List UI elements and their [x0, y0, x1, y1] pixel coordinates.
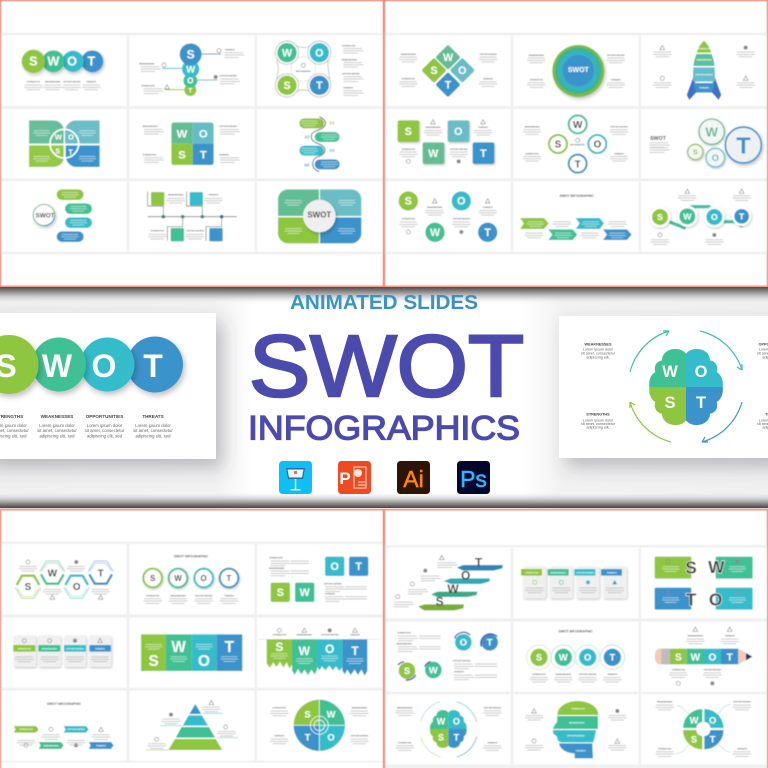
slide: dripping banners: T — [351, 644, 359, 658]
slide: right brain diagram: WEAKNESSES — [584, 342, 612, 346]
slide: timeline — [148, 192, 237, 241]
slide: diamonds: W — [443, 52, 454, 64]
slide: swirl circles — [527, 630, 625, 682]
slide: colour columns — [141, 634, 242, 671]
slide: circles with arcs: W — [429, 665, 438, 675]
slide: circles with arcs: THREATS — [454, 671, 465, 674]
slide: overlapping circles — [22, 50, 103, 90]
slide: four panels with ring: O — [68, 132, 74, 141]
slide: diamonds: S — [430, 65, 438, 77]
slide: left SWOT circles: sit amet, consectetur — [37, 428, 77, 433]
slide: ring row: OPPORTUNITIES — [195, 595, 213, 597]
slide: rocket: OPPORTUNITIES — [695, 74, 713, 76]
title: SWOT: SWOT — [249, 318, 524, 415]
slide: head silhouette: WEAKNESSES — [569, 721, 585, 724]
slide: four linked circles: INFOGRAPHIC — [296, 70, 311, 73]
slide: solid circles staggered: WEAKNESSES — [427, 206, 443, 209]
slide: left SWOT circles: O — [92, 348, 116, 384]
slide: diamonds: WEAKNESSES — [401, 53, 417, 56]
slide: puzzle square: O — [199, 128, 208, 140]
slide: 3D steps: T — [475, 555, 483, 569]
slide: swirl circles: THREATS — [607, 673, 618, 676]
slide: swirl circles: OPPORTUNITIES — [579, 674, 597, 676]
slide: dripping banners — [258, 628, 380, 676]
slide: ring cross: THREATS — [614, 152, 625, 155]
slide: donut: W — [690, 716, 699, 726]
slide: rocket: STRENGTHS — [697, 49, 711, 51]
slide: hexagons: O — [73, 582, 81, 593]
slide: solid circles staggered: W — [430, 227, 441, 239]
slide: rounded four panels with center badge — [278, 189, 361, 243]
slide: ring cross: W — [573, 120, 583, 131]
panel: centre hero band — [0, 287, 768, 509]
slide: dripping banners: STRENGTHS — [273, 635, 287, 637]
slide: ribbon with circles: T — [739, 211, 745, 221]
slide: donut: WEAKNESSES — [657, 701, 673, 704]
slide: left SWOT circles: sit amet, consectetur — [133, 428, 173, 433]
slide: serpentine pills: 04 — [304, 162, 310, 167]
slide: solid circles staggered — [399, 191, 497, 242]
slide: left SWOT circles: Lorem ipsum dolor — [87, 423, 123, 428]
band background — [0, 287, 768, 509]
slide: stacked column circles: T — [188, 87, 192, 94]
slide: serpentine pills — [299, 117, 340, 172]
panel frame — [384, 0, 768, 286]
slide: 3D steps — [394, 555, 503, 610]
slide: letter-notched rectangles: O — [709, 590, 722, 610]
slide: offset squares: T — [480, 148, 487, 160]
slide: right brain diagram: sit amet, consectetur — [581, 422, 616, 426]
slide: puzzle square: S — [178, 150, 186, 162]
slide: pencil: STRENGTHS — [672, 669, 686, 671]
slide: left SWOT circles: Lorem ipsum dolor — [39, 423, 75, 428]
slide: arrow tags: OPPORTUNITIES — [67, 729, 85, 731]
slide: puzzle square: W — [177, 128, 188, 140]
icon: Photoshop: Ps — [460, 466, 487, 492]
slide: dripping banners: W — [299, 644, 311, 658]
panel frame — [0, 510, 384, 768]
slide: quartered pie — [270, 700, 369, 751]
slide: puzzle square: WEAKNESSES — [142, 125, 158, 128]
slide: ring cross: OPPORTUNITIES — [610, 126, 628, 128]
slide: four linked circles: STRENGTHS — [342, 45, 356, 47]
slide: bubbles: SWOT — [650, 136, 667, 142]
slide: colour columns: S — [149, 653, 159, 670]
slide: letter-notched rectangles: W — [708, 557, 725, 577]
slide: offset squares: WEAKNESSES — [425, 126, 441, 129]
slide: right brain diagram: adipiscing elit, — [586, 426, 610, 430]
slide: serpentine pills: 01 — [330, 121, 335, 126]
slide: diamonds: O — [458, 65, 466, 77]
slide: bubbles: S — [693, 148, 698, 157]
slide: solid circles staggered: S — [405, 196, 412, 208]
cycle arrows — [630, 331, 742, 442]
slide: donut: O — [709, 716, 716, 726]
slide: offset squares: W — [428, 148, 439, 160]
slide: timeline: THREATS — [208, 194, 219, 197]
slide: ring cross: STRENGTHS — [525, 153, 539, 155]
icon: PowerPoint — [338, 461, 371, 494]
slide: pencil: O — [708, 652, 716, 663]
slide: left SWOT circles: adipiscing elit, sed — [87, 434, 123, 438]
slide: serpentine pills: 03 — [330, 148, 335, 153]
slide: left SWOT circles: THREATS — [142, 414, 164, 419]
slide: four panels with ring — [29, 120, 100, 167]
slide: overlapping circles: W — [47, 55, 59, 69]
slide: circles with arcs: T — [487, 638, 493, 648]
slide: offset squares: STRENGTHS — [402, 149, 416, 151]
slide: pencil: T — [727, 652, 733, 663]
slide: concentric circle: THREATS — [611, 79, 621, 82]
panel: top-right slide collection — [384, 0, 768, 286]
slide: four linked circles: T — [316, 80, 323, 92]
slide: puzzle square: T — [200, 150, 207, 162]
slide: concentric circle: OPPORTUNITIES — [607, 55, 625, 57]
slide: ring row: STRENGTHS — [146, 595, 160, 597]
slide: ring cross: INFOGRAPHIC — [570, 144, 586, 147]
slide: arrow tags — [14, 702, 114, 749]
slide: stacked column circles — [139, 43, 244, 96]
slide: four linked circles: THREATS — [343, 87, 354, 90]
slide: swirl circles: SWOT INFOGRAPHIC — [559, 630, 593, 634]
slide: circles with arcs — [396, 632, 498, 680]
slide: solid circles staggered: OPPORTUNITIES — [453, 219, 471, 221]
slide: dripping banners: O — [325, 642, 334, 656]
slide: offset squares: S — [405, 126, 412, 138]
slide: ring row: WEAKNESSES — [170, 594, 186, 597]
slide: arrow tags: SWOT INFOGRAPHIC — [47, 702, 82, 706]
slide: 3D steps: O — [461, 569, 470, 583]
slide: solid circles staggered: O — [457, 196, 465, 208]
panel: bottom-left slide collection — [0, 510, 384, 768]
slide: icon cards: OPPORTUNITIES — [66, 648, 84, 650]
slide: right brain diagram: S — [664, 394, 676, 412]
slide: diamonds: T — [445, 80, 452, 92]
slide: overlapping circles: OPPORTUNITIES — [63, 81, 81, 83]
slide: offset squares: OPPORTUNITIES — [450, 149, 468, 151]
slide: bubbles: T — [736, 133, 750, 159]
slide: squares and text: WEAKNESSES — [269, 567, 285, 570]
slide: ring cross: O — [593, 140, 601, 151]
slide: squares and text — [269, 557, 368, 602]
slide: dripping banners: S — [275, 640, 283, 654]
brain — [649, 349, 723, 425]
slide: pencil: OPPORTUNITIES — [704, 669, 722, 671]
slide: four linked circles: O — [315, 47, 323, 59]
slide: head silhouette — [525, 701, 627, 758]
slide: 3D steps: W — [447, 582, 459, 596]
slide: four panels with ring: T — [68, 147, 73, 156]
slide: hexagons: T — [98, 568, 104, 579]
slide: brain cycle — [395, 702, 502, 757]
slide: stacked column circles: W — [186, 64, 195, 74]
slide: dripping banners: WEAKNESSES — [297, 634, 313, 637]
slide: swirl circles: W — [559, 653, 568, 663]
slide: pyramid — [146, 700, 238, 750]
slide: icon cards: STRENGTHS — [18, 648, 32, 650]
heading: animated slides: ANIMATED SLIDES — [290, 291, 478, 314]
slide: swirl circles: S — [536, 653, 542, 663]
slide: left SWOT circles — [0, 313, 216, 459]
slide: right brain diagram — [559, 316, 768, 458]
slide: arrow tags: THREATS — [96, 744, 107, 747]
slide: ring row — [143, 554, 238, 604]
slide: ribbon with circles: S — [657, 212, 663, 222]
slide: ring row: W — [174, 574, 182, 583]
slide: head silhouette: THREATS — [576, 750, 586, 753]
slide: swirl circles: O — [584, 653, 591, 663]
slide: brain cycle: O — [453, 717, 460, 727]
slide: dripping banners: OPPORTUNITIES — [321, 635, 339, 637]
slide: swirl circles: T — [609, 653, 615, 663]
slide: circles with arcs: WEAKNESSES — [396, 642, 412, 645]
slide: tagged cards: THREATS — [607, 571, 617, 574]
slide: squares and text: OPPORTUNITIES — [324, 583, 342, 585]
slide: overlapping circles: WEAKNESSES — [45, 80, 61, 83]
icon: Photoshop — [457, 461, 490, 494]
slide: four linked circles: W — [282, 47, 293, 59]
panel frame — [384, 510, 768, 768]
slide: concentric circle: STRENGTHS — [530, 80, 544, 82]
slide: letter-notched rectangles: T — [686, 590, 697, 610]
slide: left SWOT circles: WEAKNESSES — [41, 414, 73, 419]
slide: brain cycle: W — [437, 717, 446, 727]
slide: overlapping circles: S — [29, 55, 38, 69]
slide: colour columns: O — [198, 653, 210, 670]
slide: overlapping circles: O — [67, 55, 77, 69]
slide: quartered pie: THREATS — [274, 735, 285, 738]
slide: left SWOT circles: Lorem ipsum dolor — [135, 423, 171, 428]
slide: left SWOT circles: W — [42, 348, 73, 384]
slide: right brain diagram: O — [695, 363, 708, 381]
slide: timeline: WEAKNESSES — [168, 194, 184, 197]
panel frame — [0, 0, 384, 286]
slide: hexagons: S — [25, 582, 32, 593]
slide: left SWOT circles: T — [143, 348, 163, 384]
slide: pencil: W — [691, 652, 701, 663]
slide: four linked circles — [275, 41, 363, 97]
slide: puzzle square: STRENGTHS — [143, 154, 157, 156]
slide: right brain diagram: T — [696, 394, 706, 412]
slide: right brain diagram: W — [662, 363, 678, 381]
slide: circles with arcs: OPPORTUNITIES — [453, 661, 471, 663]
slide: left SWOT circles: sit amet, consectetur — [85, 428, 125, 433]
slide: right brain diagram: STRENGTHS — [586, 412, 610, 416]
slide: donut: S — [691, 734, 697, 744]
slide: swirl circles: WEAKNESSES — [556, 673, 572, 676]
slide: right brain diagram: adipiscing elit, — [586, 356, 610, 360]
slide: quartered pie: OPPORTUNITIES — [351, 736, 369, 738]
slide: hexagons: W — [48, 568, 58, 579]
slide: puzzle square: OPPORTUNITIES — [219, 126, 237, 128]
title: infographics: INFOGRAPHICS — [248, 410, 520, 448]
slide: offset squares — [398, 120, 494, 164]
slide: brain cycle: THREATS — [487, 742, 498, 745]
slide: solid circles staggered: STRENGTHS — [402, 219, 416, 221]
slide: right brain diagram: Lorem ipsum dolor — [583, 418, 614, 422]
slide: squares and text: THREATS — [325, 592, 336, 595]
icon: PowerPoint: P — [339, 469, 351, 488]
slide: diamonds: STRENGTHS — [402, 79, 416, 81]
icon: Illustrator: Ai — [403, 466, 424, 492]
slide: stacked column circles: S — [187, 47, 195, 61]
panel: bottom-right slide collection — [384, 510, 768, 768]
slide: colour columns: W — [171, 639, 186, 656]
slide: timeline: OPPORTUNITIES — [186, 230, 204, 232]
slide: brain cycle: OPPORTUNITIES — [484, 707, 502, 709]
slide: rocket: THREATS — [699, 87, 710, 90]
slide: puzzle square: THREATS — [219, 153, 230, 156]
slide: stacked column circles: OPPORTUNITIES — [219, 76, 237, 78]
slide: arrow tags: STRENGTHS — [19, 729, 33, 731]
slide: pencil: WEAKNESSES — [688, 635, 704, 638]
slide: bubbles — [650, 119, 761, 167]
slide: concentric circle: WEAKNESSES — [529, 54, 545, 57]
slide: ring row: O — [201, 574, 207, 583]
slide: donut — [655, 701, 751, 757]
slide: four panels with ring: W — [55, 132, 62, 141]
slide: offset squares: O — [454, 126, 462, 138]
slide: donut: OPPORTUNITIES — [733, 702, 751, 704]
slide: quartered pie: W — [327, 709, 336, 719]
slide: tagged cards: OPPORTUNITIES — [576, 572, 594, 574]
slide: bubbles: W — [705, 125, 718, 140]
slide: diamonds: THREATS — [483, 78, 494, 81]
slide: four panels with ring: S — [55, 146, 60, 155]
slide: head silhouette: OPPORTUNITIES — [567, 736, 585, 738]
slide: letter-notched rectangles: S — [685, 558, 697, 578]
slide: letter-notched rectangles — [655, 557, 753, 610]
slide: ring cross: T — [575, 159, 581, 170]
icon: Illustrator — [397, 461, 430, 494]
slide: four linked circles: WEAKNESSES — [342, 58, 358, 61]
slide: rounded four panels with center badge: SWOT — [307, 211, 331, 220]
slide: left SWOT circles: OPPORTUNITIES — [86, 414, 123, 419]
slide: right brain diagram: Lorem ipsum dolor — [583, 348, 614, 352]
slide: ring row: THREATS — [224, 594, 235, 597]
slide: ring cross: S — [555, 140, 562, 151]
slide: arrow tags: WEAKNESSES — [43, 744, 59, 747]
slide: tagged cards: STRENGTHS — [525, 572, 539, 574]
slide: brain cycle: STRENGTHS — [398, 743, 412, 745]
slide: brain cycle: S — [438, 732, 444, 742]
slide: right brain diagram: sit amet, consectetur — [581, 352, 616, 356]
slide: bubbles: O — [712, 153, 719, 163]
slide: tagged cards: WEAKNESSES — [551, 571, 567, 574]
slide: concentric circle: SWOT — [568, 67, 590, 74]
slide: icon cards: THREATS — [95, 647, 106, 650]
slide: diamonds — [399, 45, 497, 97]
slide: hexagons — [15, 560, 113, 599]
slide: four linked circles: OPPORTUNITIES — [342, 74, 360, 76]
slide: head silhouette: STRENGTHS — [571, 708, 585, 710]
slide: overlapping circles: STRENGTHS — [27, 81, 41, 83]
slide: offset squares: THREATS — [478, 126, 489, 129]
slide: quartered pie: S — [305, 709, 311, 719]
slide: pencil — [655, 627, 752, 685]
slide: solid circles staggered: T — [484, 227, 491, 239]
icon: Keynote — [279, 461, 312, 494]
slide: solid circles staggered: THREATS — [483, 206, 493, 209]
slide: pencil: S — [675, 652, 682, 663]
slide: quartered pie: T — [305, 733, 311, 743]
slide: squares and text: W — [300, 587, 311, 599]
slide: swirl circles: STRENGTHS — [532, 674, 546, 676]
slide: SWOT badge and pills — [33, 189, 92, 242]
slide: stacked column circles: STRENGTHS — [141, 85, 155, 87]
slide: chevrons — [520, 194, 632, 240]
slide: squares and text: S — [277, 587, 284, 599]
slide: circles with arcs: O — [460, 638, 467, 648]
slide: donut: THREATS — [737, 747, 748, 750]
slide: circles with arcs: S — [404, 666, 410, 676]
slide: overlapping circles: T — [87, 55, 95, 69]
panel: top-left slide collection — [0, 0, 384, 286]
slide: squares and text: O — [331, 561, 339, 573]
slide: 3D steps: S — [436, 595, 444, 609]
slide: ribbon with circles: W — [683, 211, 692, 221]
slide: timeline: STRENGTHS — [151, 230, 165, 232]
slide: donut: T — [710, 734, 716, 744]
slide: quartered pie: STRENGTHS — [273, 708, 287, 710]
slide: donut: STRENGTHS — [658, 748, 672, 750]
slide: puzzle square — [142, 122, 240, 165]
slide: quartered pie: WEAKNESSES — [352, 707, 368, 710]
slide: pencil: THREATS — [725, 635, 735, 638]
slide: squares and text: STRENGTHS — [269, 558, 283, 560]
slide: tagged cards — [521, 567, 627, 598]
slide: colour columns: T — [225, 639, 235, 656]
slide: ring row: SWOT INFOGRAPHIC — [174, 554, 209, 558]
slide: ring row: S — [150, 574, 156, 583]
slide: chevrons: SWOT INFOGRAPHIC — [560, 194, 594, 198]
slide: ribbon with circles — [649, 189, 751, 245]
slide: stacked column circles: WEAKNESSES — [139, 62, 155, 65]
slide: brain cycle: T — [454, 732, 460, 742]
slide: rocket: WEAKNESSES — [696, 59, 712, 62]
slide: ring row: T — [227, 574, 232, 583]
slide: overlapping circles: THREATS — [86, 80, 97, 83]
slide: ribbon with circles: O — [711, 212, 718, 222]
slide: four linked circles: S — [283, 80, 291, 92]
slide: squares and text: T — [355, 561, 362, 573]
slide: brain cycle: WEAKNESSES — [397, 706, 413, 709]
slide: left SWOT circles: adipiscing elit, sed — [39, 434, 75, 438]
slide: diamonds: OPPORTUNITIES — [479, 54, 497, 56]
slide: ring cross: WEAKNESSES — [524, 125, 540, 128]
slide: stacked column circles: THREATS — [225, 48, 235, 51]
slide: left SWOT circles: adipiscing elit, sed — [135, 434, 171, 438]
slide: dripping banners: THREATS — [350, 634, 361, 637]
slide: concentric circle — [527, 45, 625, 97]
slide: circles with arcs: STRENGTHS — [397, 633, 411, 635]
slide: stacked column circles: O — [187, 77, 193, 86]
slide: quartered pie: O — [327, 733, 335, 743]
slide: icon cards — [13, 636, 111, 667]
slide: serpentine pills: 02 — [305, 135, 310, 140]
slide: icon cards: WEAKNESSES — [42, 647, 58, 650]
slide: ring cross — [523, 115, 628, 173]
slide: rocket — [653, 41, 755, 100]
slide: SWOT badge and pills: SWOT — [36, 212, 55, 219]
